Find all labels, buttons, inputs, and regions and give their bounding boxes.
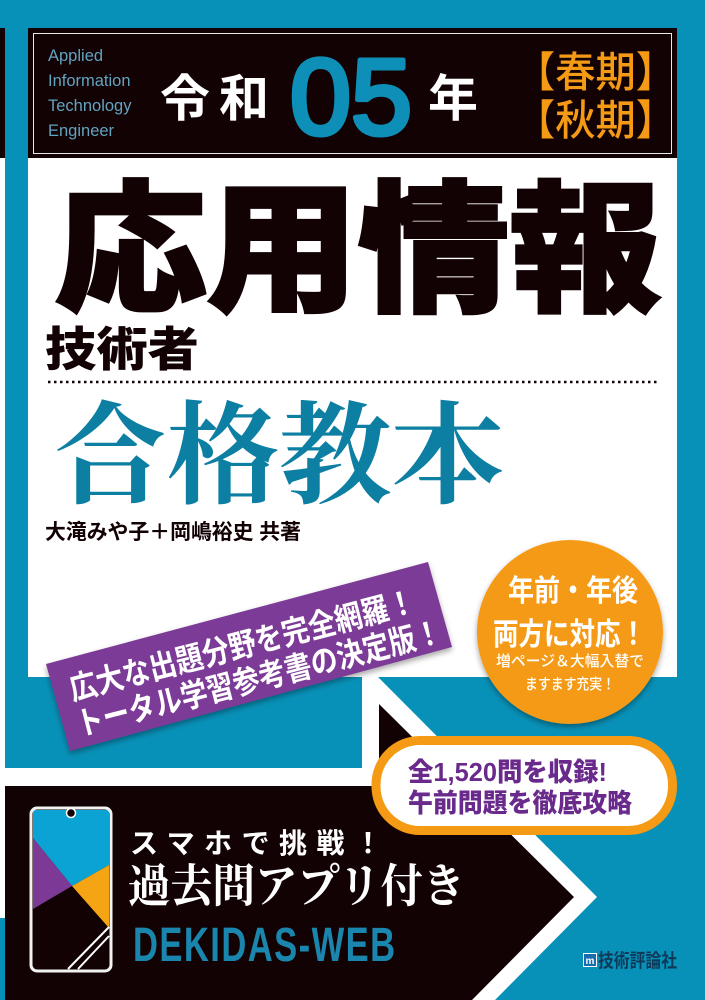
icon: smartphone (31, 808, 111, 971)
dotted divider (48, 381, 660, 383)
publisher logo: 技術評論社 (598, 949, 677, 972)
authors: 大滝みや子＋岡嶋裕史 共著 (45, 521, 301, 544)
orange circle callout: 年前・年後 (508, 575, 638, 608)
title: 応用情報 (55, 172, 661, 331)
era label: 令 (160, 71, 210, 127)
english subtitle: Applied (48, 47, 103, 65)
app title: 過去問アプリ付き (128, 861, 465, 912)
english subtitle (48, 47, 132, 140)
era label second: 和 (219, 71, 269, 127)
rounded callout (376, 740, 672, 830)
book title: 合格教本 (54, 396, 504, 519)
orange circle callout: ますます充実！ (525, 676, 615, 693)
black arrow (5, 704, 574, 1000)
left edge bar (0, 28, 5, 158)
white lower band and chevron (0, 677, 597, 1000)
orange circle callout (477, 540, 663, 724)
purple badge: 広大な出題分野を完全網羅！ (65, 583, 419, 707)
season labels (515, 49, 676, 144)
purple badge (46, 562, 452, 751)
english subtitle: Engineer (48, 122, 115, 140)
year label: 年 (428, 71, 478, 127)
year number: 05 (290, 36, 412, 157)
app tagline: スマホで挑戦！ (130, 828, 382, 859)
publisher logo (583, 949, 677, 972)
rounded callout: 午前問題を徹底攻略 (408, 788, 632, 818)
season labels: 【春期】 (515, 49, 676, 96)
orange circle callout: 両方に対応！ (493, 617, 646, 652)
english subtitle: Technology (48, 97, 132, 115)
left white edge strip (0, 158, 5, 918)
rounded callout: 全1,520問を収録! (408, 757, 607, 787)
season labels: 【秋期】 (515, 97, 676, 144)
panel: header (28, 28, 677, 158)
orange circle callout: 増ページ＆大幅入替で (496, 652, 644, 670)
subtitle: 技術者 (45, 323, 199, 376)
purple badge: トータル学習参考書の決定版！ (73, 614, 446, 743)
english subtitle: Information (48, 72, 131, 90)
publisher logo: m (586, 956, 594, 967)
app name: DEKIDAS-WEB (133, 917, 395, 971)
panel: white title area (28, 158, 677, 677)
